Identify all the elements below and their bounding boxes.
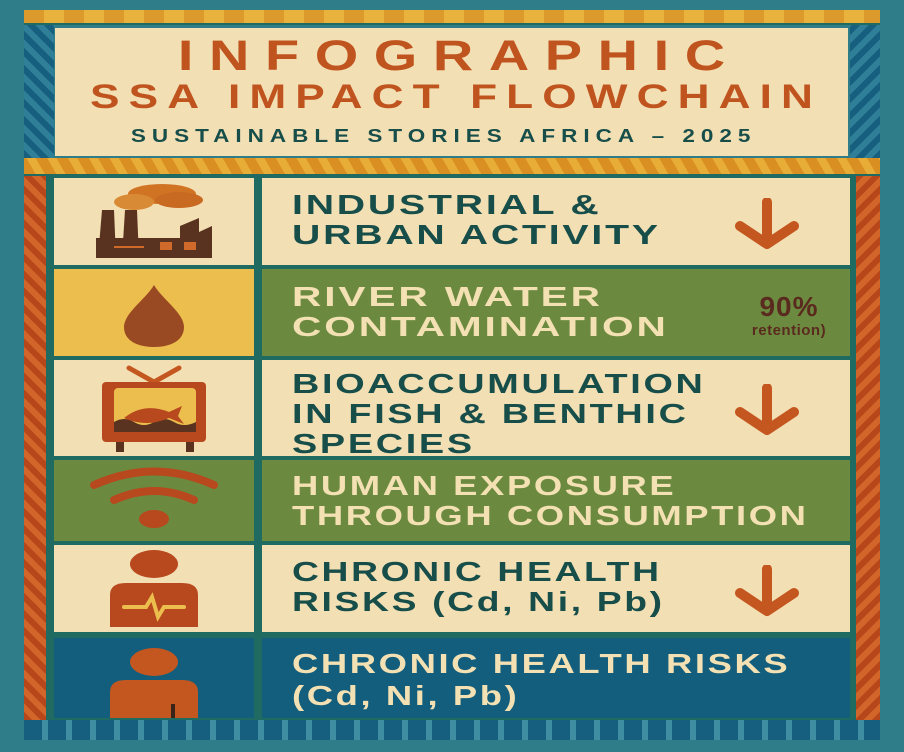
- text: chronic health blue: [262, 638, 850, 718]
- text: chronic health: [262, 545, 850, 632]
- text: bioaccumulation: IN FISH & BENTHIC: [292, 398, 689, 429]
- text: industrial: URBAN ACTIVITY: [292, 219, 661, 250]
- text: bioaccumulation: BIOACCUMULATION: [292, 368, 706, 399]
- icon: person: [54, 638, 254, 718]
- row 6: chronic health blue: [54, 638, 850, 718]
- text: human exposure: THROUGH CONSUMPTION: [292, 500, 809, 531]
- subtitle heading: SSA IMPACT FLOWCHAIN: [90, 78, 822, 116]
- text: chronic health: CHRONIC HEALTH: [292, 556, 662, 587]
- title: INFOGRAPHIC: [178, 32, 741, 80]
- right orange border: [856, 176, 880, 720]
- icon: factory: [54, 178, 254, 265]
- row 2: river: [54, 269, 850, 356]
- arrow: [735, 384, 799, 436]
- text: river: RIVER WATER: [292, 281, 603, 312]
- text: river: CONTAMINATION: [292, 311, 669, 342]
- top band: [24, 10, 880, 25]
- text: industrial: INDUSTRIAL &: [292, 189, 601, 220]
- row 4: human exposure: [54, 460, 850, 541]
- row 1: industrial: [54, 178, 850, 265]
- row 5: chronic health: [54, 545, 850, 632]
- text: chronic health blue: (Cd, Ni, Pb): [292, 680, 519, 711]
- left orange border: [24, 176, 46, 720]
- tagline: SUSTAINABLE STORIES AFRICA – 2025: [131, 126, 756, 146]
- arrow: [735, 198, 799, 250]
- text: industrial: [262, 178, 850, 265]
- callout: 90% retention: [752, 291, 826, 339]
- callout: 90% retention: 90%: [759, 291, 819, 322]
- yellow band: [24, 158, 880, 176]
- header right border: [850, 25, 880, 158]
- row 3: bioaccumulation: [54, 360, 850, 459]
- icon: drop: [54, 269, 254, 356]
- text: chronic health blue: CHRONIC HEALTH RISKS: [292, 648, 790, 679]
- frame: [46, 176, 856, 720]
- icon: person with pulse: [54, 545, 254, 632]
- text: bioaccumulation: [262, 360, 850, 456]
- bottom band: [24, 720, 880, 740]
- icon: waves: [54, 460, 254, 541]
- text: bioaccumulation: SPECIES: [292, 428, 475, 459]
- header panel: [55, 28, 848, 156]
- header left border: [24, 25, 54, 158]
- callout: 90% retention: retention): [752, 322, 826, 339]
- icon: fish tv: [54, 360, 254, 456]
- text: river: [262, 269, 850, 356]
- arrow: [735, 565, 799, 616]
- text: human exposure: [262, 460, 850, 541]
- text: chronic health: RISKS (Cd, Ni, Pb): [292, 586, 665, 617]
- text: human exposure: HUMAN EXPOSURE: [292, 470, 676, 501]
